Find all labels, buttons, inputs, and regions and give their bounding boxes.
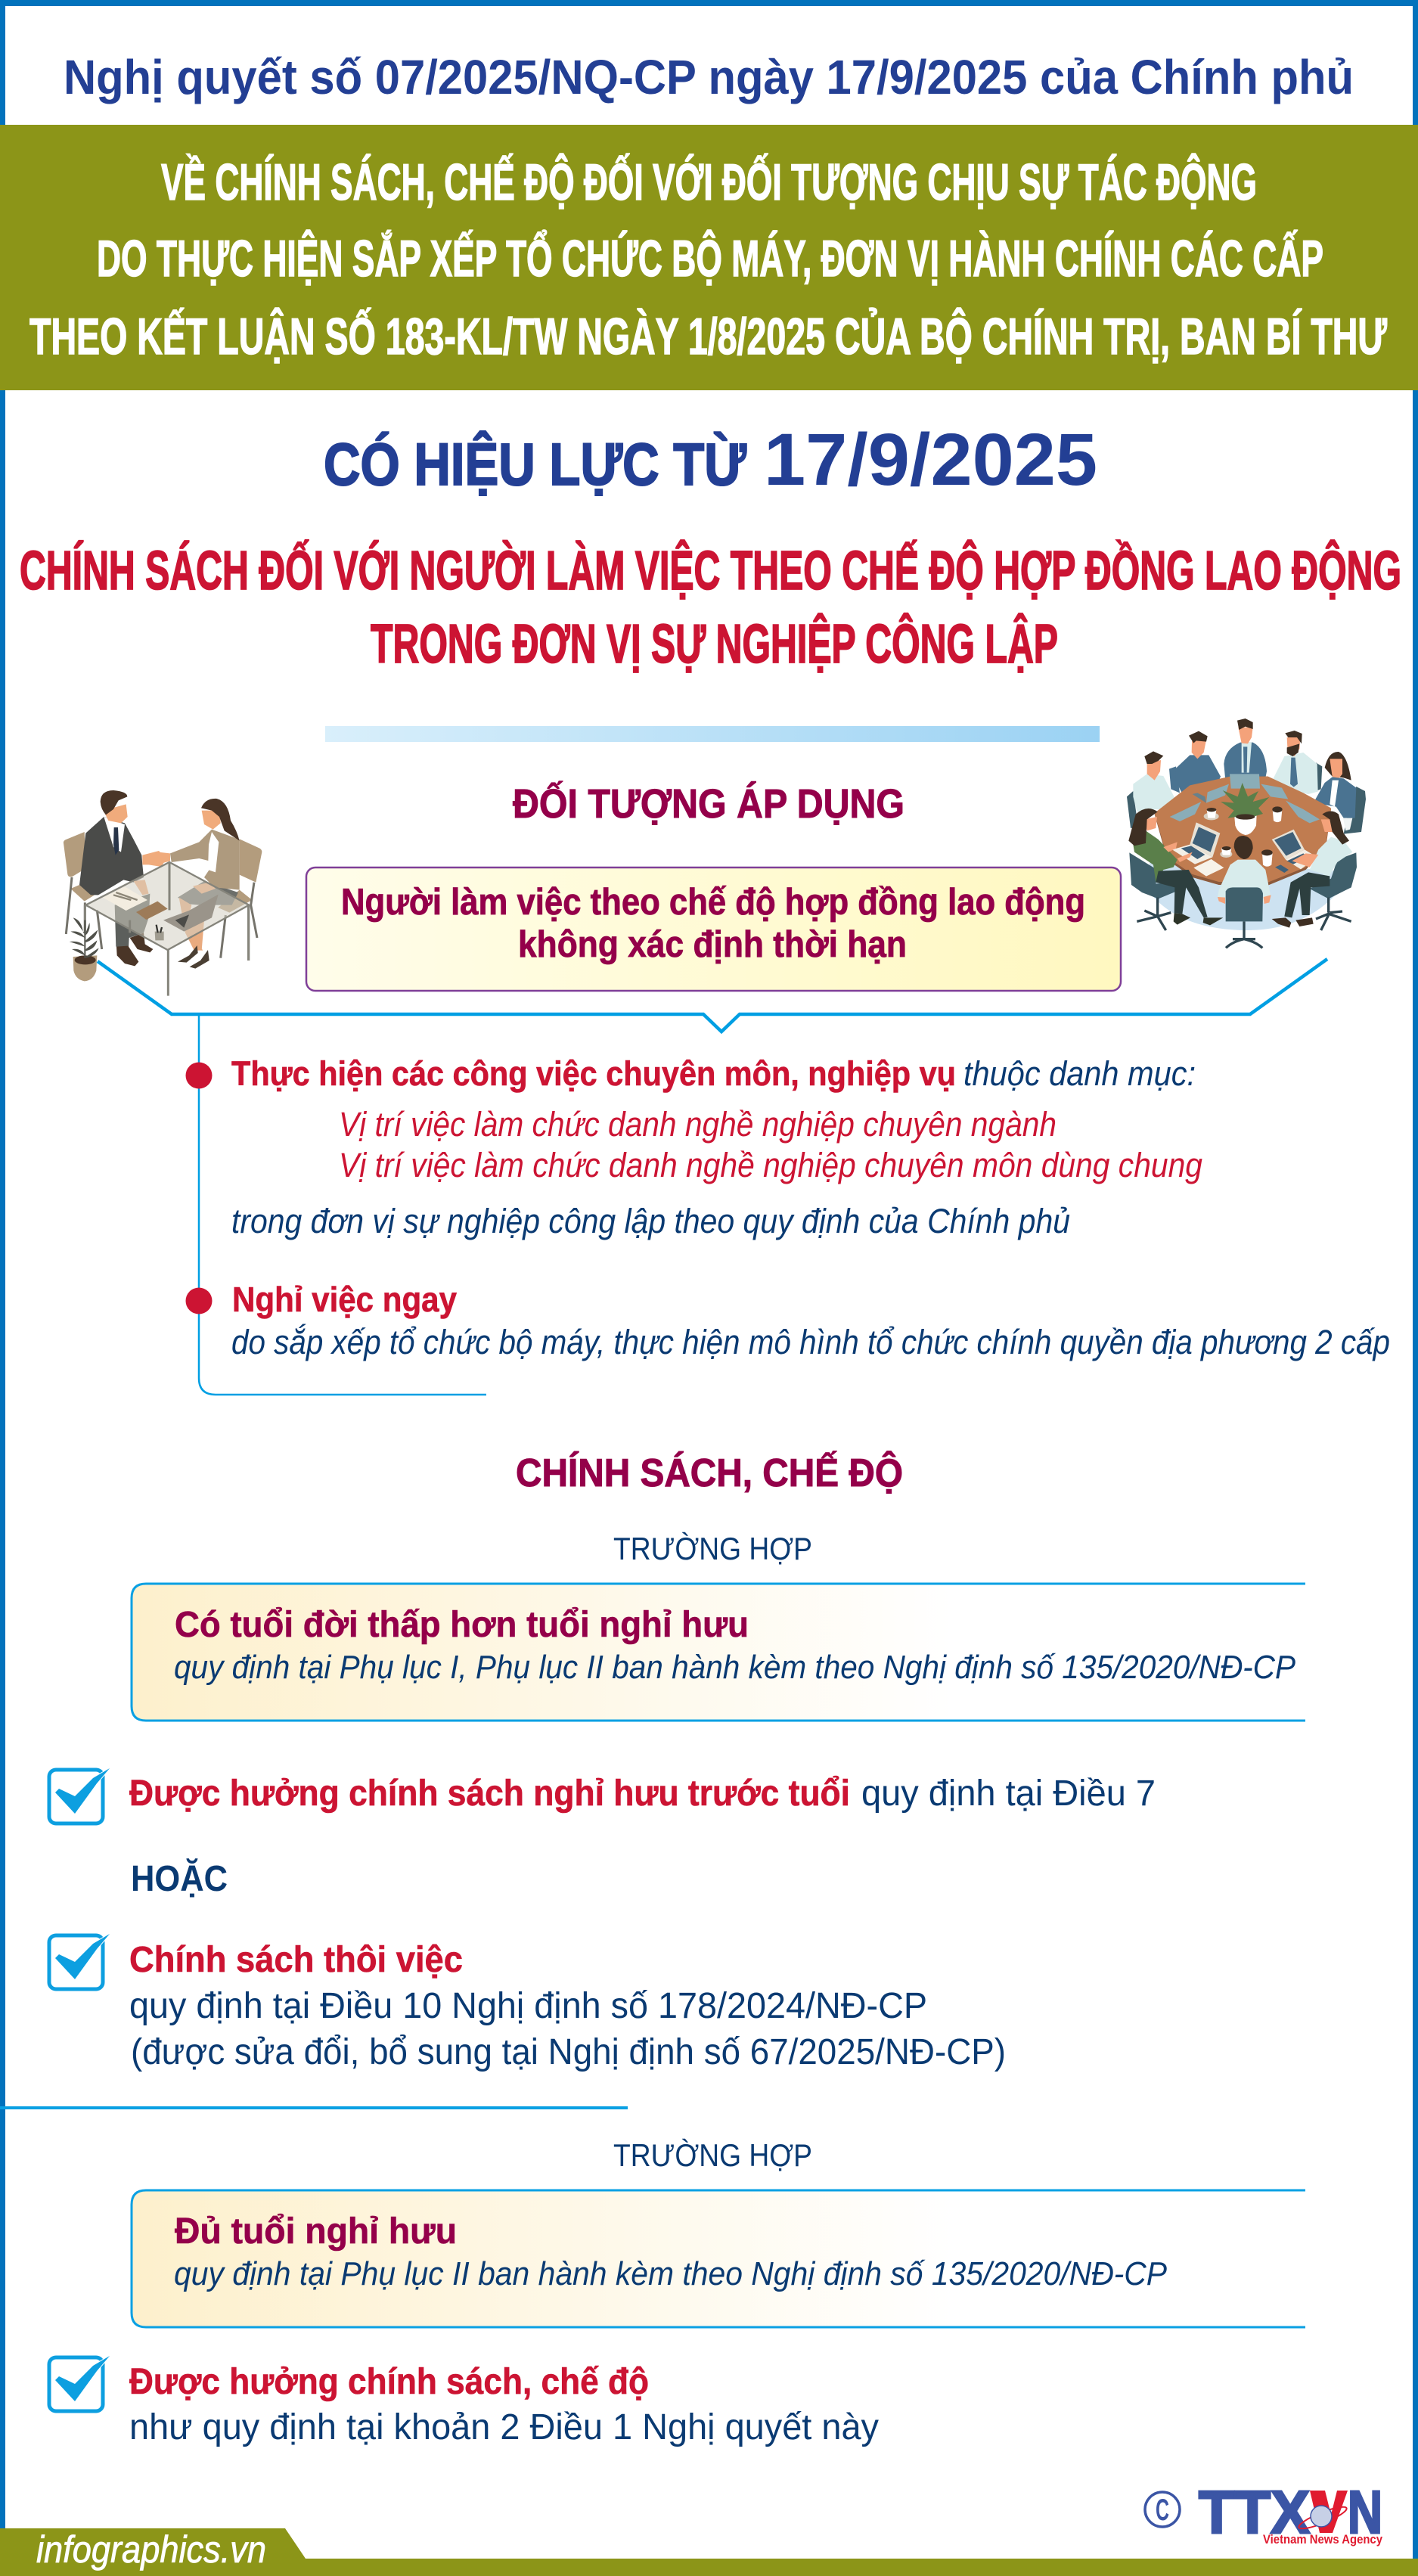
option: retirement policy: như quy định tại khoản 2 Điều 1 Nghị quyết này [129, 2407, 879, 2447]
person: front centre with chair [1218, 836, 1271, 948]
icon: checkbox [49, 2356, 110, 2411]
logo: TTXVN: C [1156, 2494, 1169, 2527]
condition list: first bullet: trong đơn vị sự nghiệp công lập theo quy định của Chính phủ [231, 1202, 1070, 1240]
logo: TTXVN [1145, 2478, 1382, 2547]
left chair [64, 832, 102, 949]
red policy heading [20, 539, 1401, 675]
illustration: handshake at glass table [64, 790, 262, 996]
option: retirement policy: Được hưởng chính sách, chế độ [129, 2362, 649, 2402]
laptops on table [1170, 774, 1320, 877]
option: early retirement: Được hưởng chính sách nghỉ hưu trước tuổi [129, 1774, 850, 1814]
person: front left woman with chair [1128, 808, 1223, 930]
person: seated back left [1133, 751, 1187, 812]
right chair [218, 839, 262, 961]
panel: case two box: Đủ tuổi nghỉ hưu [175, 2211, 457, 2252]
effective date heading [324, 418, 1097, 501]
timeline connector line [199, 1014, 486, 1395]
condition list: first bullet: Thực hiện các công việc chuyên môn, nghiệp vụ [231, 1054, 956, 1093]
option: early retirement [49, 1768, 1156, 1823]
effective date heading: 17/9/2025 [764, 418, 1097, 501]
person: back left blue shirt [1175, 731, 1221, 793]
option: severance policy: Chính sách thôi việc [129, 1940, 463, 1980]
bracket connector [98, 959, 1327, 1032]
red policy heading: TRONG ĐƠN VỊ SỰ NGHIỆP CÔNG LẬP [371, 613, 1058, 675]
option: retirement policy [49, 2356, 879, 2447]
icon: checkbox [49, 1768, 110, 1823]
label: case one: TRƯỜNG HỢP [613, 1531, 812, 1566]
logo: TTXVN: Vietnam News Agency [1263, 2532, 1382, 2547]
condition list: first bullet [186, 1054, 1202, 1240]
panel: case one box: quy định tại Phụ lục I, Phụ lục II ban hành kèm theo Nghị định số 135/2020/NĐ-CP [174, 1649, 1296, 1686]
centre plant [1221, 783, 1269, 835]
callout: subject definition box [306, 867, 1121, 991]
person: back right woman [1314, 752, 1356, 830]
logo: TTXVN: TTX [1199, 2478, 1310, 2546]
condition list: first bullet: Vị trí việc làm chức danh nghề nghiệp chuyên ngành [339, 1105, 1057, 1144]
woman [158, 799, 240, 969]
option: severance policy: quy định tại Điều 10 Nghị định số 178/2024/NĐ-CP [129, 1986, 927, 2026]
option: severance policy [49, 1934, 1006, 2072]
callout: subject definition box: Người làm việc theo chế độ hợp đồng lao động [341, 882, 1085, 923]
label: or: HOẶC [131, 1858, 228, 1899]
heading: applicable subjects: ĐỐI TƯỢNG ÁP DỤNG [513, 781, 904, 827]
glass table [85, 862, 249, 996]
gradient divider bar [325, 726, 1100, 742]
man [79, 790, 166, 966]
illustration: team meeting at round table [1127, 718, 1366, 948]
logo: TTXVN: N [1348, 2478, 1382, 2546]
person: back right bearded [1272, 731, 1318, 794]
footer: olive tab and bar: infographics.vn [36, 2528, 266, 2571]
person: front right woman with chair [1272, 811, 1357, 930]
condition list: first bullet: Vị trí việc làm chức danh nghề nghiệp chuyên môn dùng chung [339, 1146, 1202, 1184]
banner: olive subtitle [0, 125, 1418, 390]
floor disc [1150, 857, 1354, 930]
section divider [0, 2106, 628, 2109]
footer: olive tab and bar [0, 2528, 1418, 2576]
round table [1155, 777, 1331, 886]
person: back centre blue suit [1224, 718, 1267, 777]
back chairs [1127, 762, 1366, 834]
callout: subject definition box: không xác định thời hạn [518, 924, 907, 965]
condition list: second bullet [186, 1280, 1390, 1361]
condition list: second bullet: Nghỉ việc ngay [232, 1280, 457, 1319]
panel: case one box [132, 1584, 1305, 1721]
effective date heading: CÓ HIỆU LỰC TỪ [324, 430, 746, 498]
potted plant [70, 917, 99, 981]
label: case two: TRƯỜNG HỢP [613, 2137, 812, 2173]
panel: case one box: Có tuổi đời thấp hơn tuổi nghỉ hưu [175, 1605, 749, 1645]
icon: checkbox [49, 1934, 110, 1989]
option: early retirement: quy định tại Điều 7 [861, 1774, 1156, 1814]
panel: case two box: quy định tại Phụ lục II ban hành kèm theo Nghị định số 135/2020/NĐ-CP [174, 2255, 1168, 2292]
condition list: first bullet: thuộc danh mục: [963, 1054, 1196, 1093]
title: resolution name: Nghị quyết số 07/2025/NQ-CP ngày 17/9/2025 của Chính phủ [64, 50, 1354, 104]
option: severance policy: (được sửa đổi, bổ sung tại Nghị định số 67/2025/NĐ-CP) [131, 2032, 1006, 2072]
cups on table [1204, 806, 1289, 873]
panel: case two box [132, 2190, 1305, 2327]
heading: policies: CHÍNH SÁCH, CHẾ ĐỘ [516, 1451, 903, 1495]
